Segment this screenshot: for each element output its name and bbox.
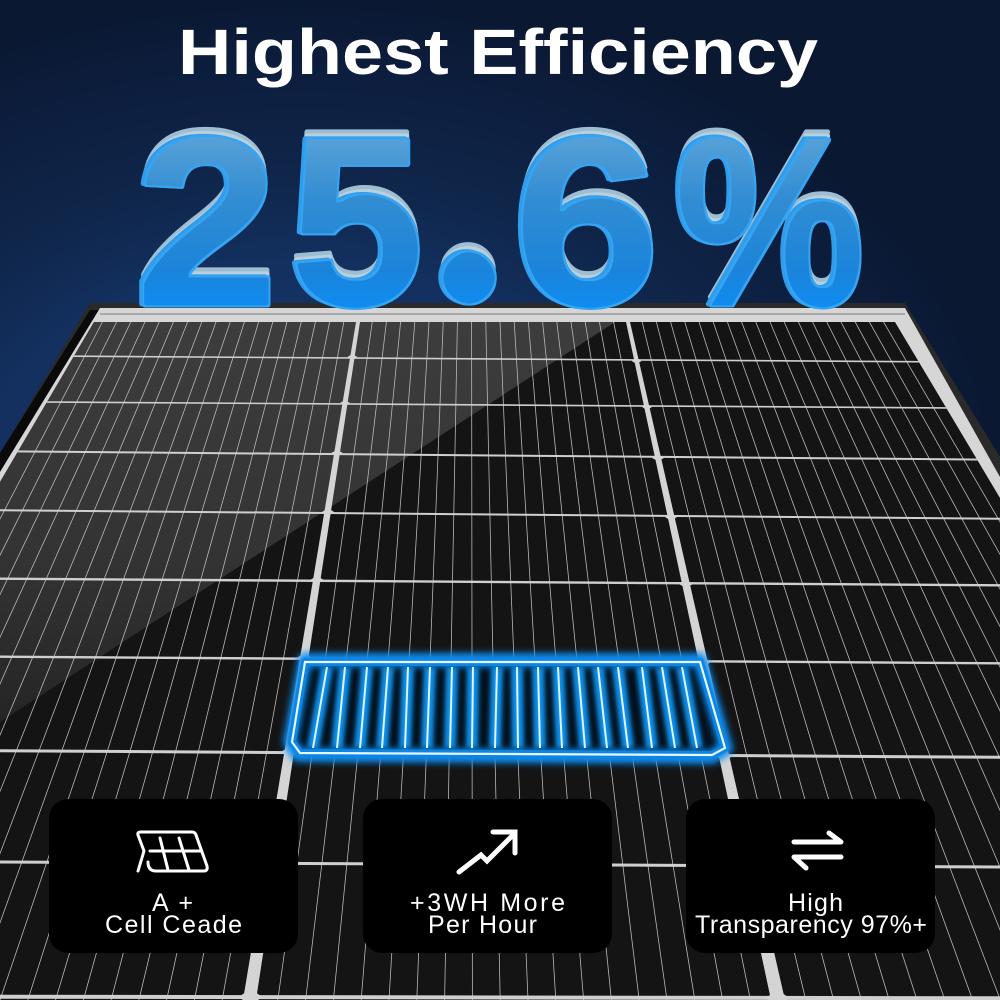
label: A+ — [152, 889, 193, 917]
label line 2: Cell Ceade — [105, 911, 242, 939]
card: A+ cell grade — [49, 799, 298, 953]
highlighted solar cell — [290, 660, 726, 757]
big 3D percentage figure — [136, 7, 865, 372]
icon: exchange arrows — [794, 833, 841, 868]
label line 2: Per Hour — [428, 911, 537, 939]
icon: trending arrow — [459, 832, 515, 872]
left black side of frame — [0, 310, 100, 472]
card: more energy — [363, 799, 612, 953]
cell dark base — [292, 662, 725, 755]
cell grid lines — [0, 322, 1000, 1000]
card: high transparency — [686, 799, 935, 953]
blue glow around busbars — [313, 667, 697, 748]
big 3D percentage figure: 2 — [136, 88, 278, 356]
gap junction notches — [238, 354, 790, 1000]
card background — [49, 799, 298, 953]
label: +3WH More — [410, 889, 565, 917]
inner blue glow band — [292, 662, 725, 755]
big 3D percentage figure: 6 — [514, 88, 660, 356]
big 3D percentage figure: . — [428, 7, 510, 372]
outer blue glow — [290, 660, 726, 757]
cell area — [0, 322, 1000, 1000]
title: Highest Efficiency — [178, 16, 818, 88]
panel silver frame — [0, 308, 1000, 1000]
big 3D percentage figure: 5 — [290, 88, 424, 356]
busbar lines — [313, 667, 697, 748]
white cell outline — [292, 662, 725, 755]
solar panel — [0, 303, 1000, 1000]
frame shading stripe — [100, 313, 905, 315]
dark cells — [0, 322, 1000, 1000]
panel dark outer frame — [0, 303, 1000, 1000]
diagonal glass reflection — [0, 322, 615, 722]
card background — [363, 799, 612, 953]
horizontal cell row gaps — [0, 356, 1000, 998]
big 3D percentage figure: % — [675, 88, 865, 356]
card background — [686, 799, 935, 953]
label line 2: Transparency 97%+ — [695, 911, 927, 939]
label: High — [788, 889, 843, 917]
icon: solar panel — [138, 832, 207, 871]
vertical string gaps — [243, 322, 785, 1000]
